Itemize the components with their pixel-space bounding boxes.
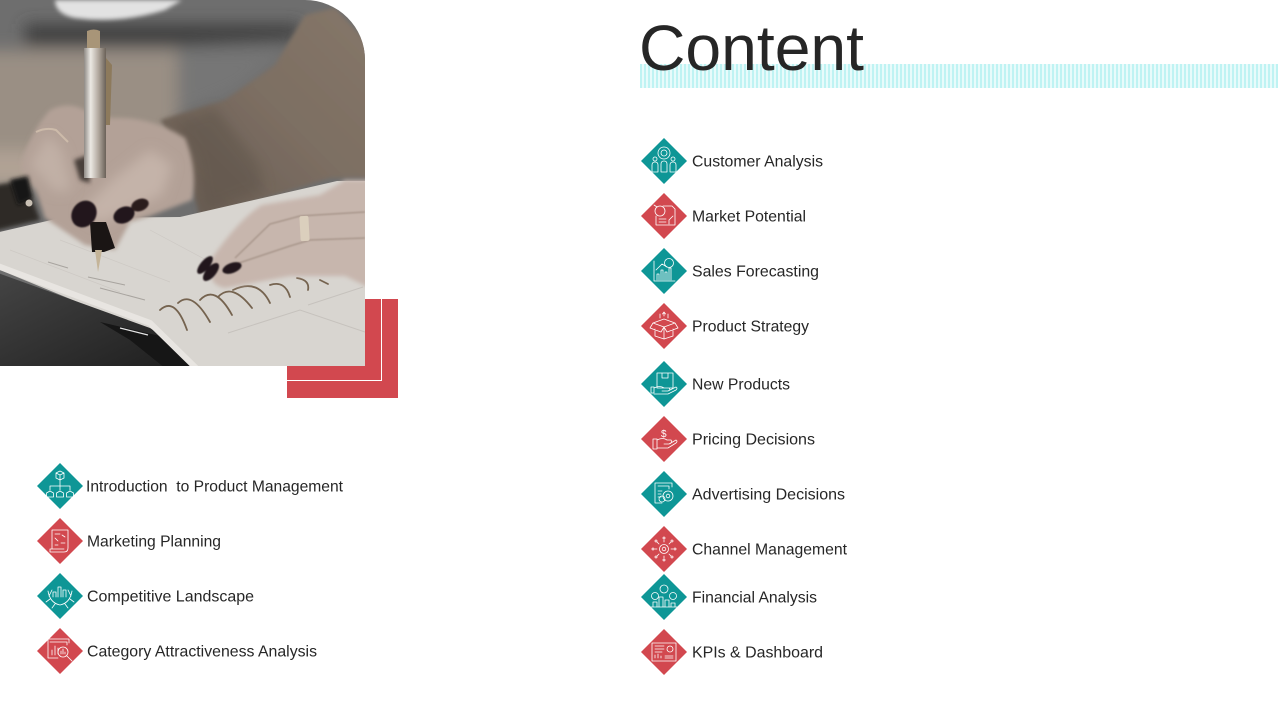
writing hand [10, 105, 194, 250]
item: Marketing Planning: Marketing Planning [87, 534, 221, 550]
item: Advertising Decisions [641, 471, 845, 517]
item: KPIs & Dashboard: KPIs & Dashboard [692, 644, 823, 662]
item: Marketing Planning [37, 518, 221, 564]
item: Sales Forecasting: Sales Forecasting [692, 264, 819, 280]
item: New Products: New Products [692, 376, 790, 394]
item: Pricing Decisions [641, 416, 815, 462]
pen [84, 30, 115, 272]
item: Advertising Decisions: Advertising Decisions [692, 486, 845, 504]
item: Market Potential: Market Potential [692, 208, 806, 226]
item: Customer Analysis [641, 138, 823, 184]
item: Financial Analysis [641, 574, 817, 620]
item: Sales Forecasting [641, 248, 819, 294]
item: Competitive Landscape: Competitive Landscape [87, 588, 254, 606]
item: Category Attractiveness Analysis [37, 628, 317, 674]
item: Product Strategy [641, 303, 809, 349]
item: Introduction to Product Management: Introduction to Product Management [86, 478, 344, 496]
item: Pricing Decisions: $ [661, 429, 667, 440]
sweater sleeve [160, 8, 370, 218]
item: Financial Analysis: Financial Analysis [692, 590, 817, 606]
spiral binding [160, 278, 328, 330]
item: Product Strategy: Product Strategy [692, 318, 809, 336]
item: New Products [641, 361, 790, 407]
resting hand [194, 180, 370, 288]
item: Channel Management: Channel Management [692, 542, 848, 558]
item: Market Potential [641, 193, 806, 239]
notebook [0, 181, 370, 370]
item: Category Attractiveness Analysis: Category Attractiveness Analysis [87, 644, 317, 660]
item: Channel Management [641, 526, 848, 572]
left list [37, 463, 344, 674]
right list [641, 138, 848, 675]
photo: hands writing in a spiral notebook [0, 0, 370, 370]
white blurred object at top [55, 0, 182, 20]
title text: Content [639, 12, 864, 84]
title [639, 12, 1278, 88]
item: KPIs & Dashboard [641, 629, 823, 675]
item: Pricing Decisions: Pricing Decisions [692, 432, 815, 448]
item: Customer Analysis: Customer Analysis [692, 154, 823, 170]
item: Competitive Landscape [37, 573, 254, 619]
title underline stripe [640, 64, 1278, 88]
nails [70, 198, 150, 228]
item: Introduction to Product Management [37, 463, 344, 509]
decorative red corner bracket [287, 299, 398, 398]
